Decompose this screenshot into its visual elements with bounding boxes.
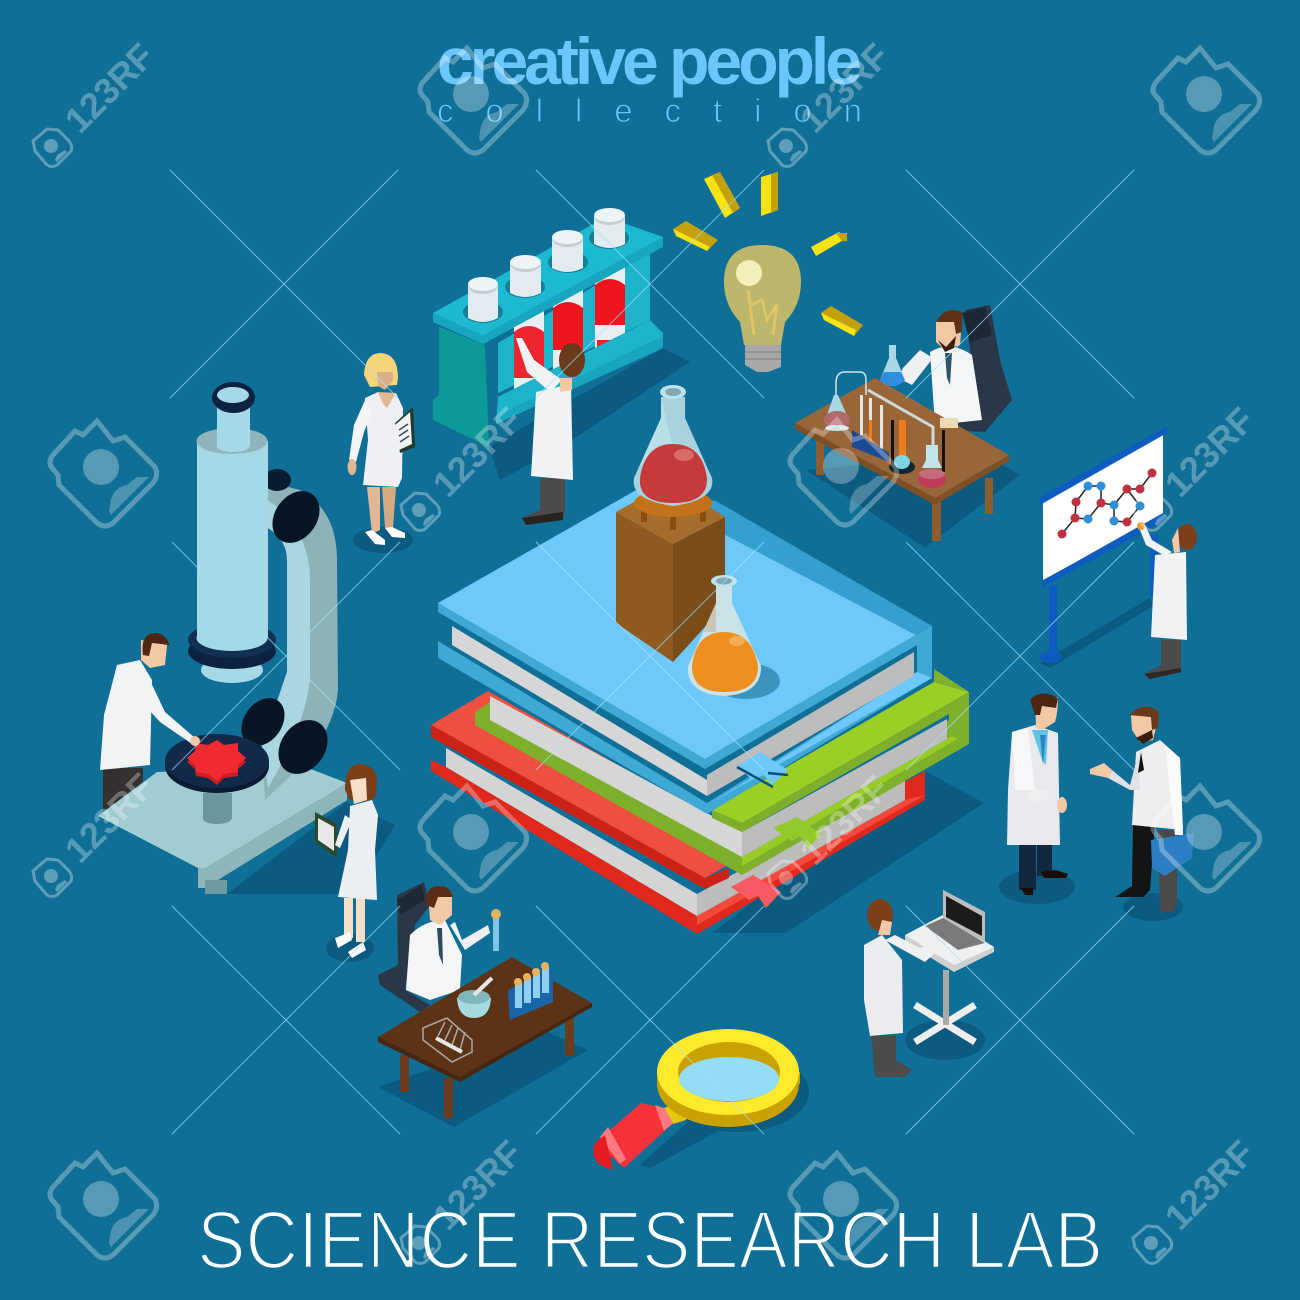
scientist at whiteboard bbox=[1137, 522, 1197, 679]
orange flask bbox=[688, 575, 780, 699]
desk top bbox=[378, 957, 592, 1077]
trolley base bbox=[915, 1005, 975, 1042]
tube bbox=[201, 657, 263, 683]
shadow bbox=[665, 1052, 809, 1132]
glass bbox=[724, 245, 801, 345]
watermark: diagonal hairlines bbox=[170, 170, 1134, 1134]
board shadow bbox=[1040, 598, 1153, 668]
books shadow bbox=[712, 771, 984, 933]
scientist with laptop trolley bbox=[864, 890, 994, 1077]
whiteboard with molecule bbox=[1040, 426, 1167, 668]
red book bbox=[431, 691, 925, 934]
person bbox=[871, 1035, 912, 1077]
shirt bbox=[930, 347, 982, 425]
glassware bbox=[824, 372, 958, 488]
scientist right bbox=[1090, 707, 1194, 921]
legs bbox=[1049, 585, 1057, 655]
tube 3 glass and liquid bbox=[553, 250, 583, 375]
mortar bbox=[457, 992, 491, 1018]
title: SCIENCE RESEARCH LAB bbox=[197, 1195, 1103, 1286]
screw base bbox=[745, 345, 781, 372]
desk with seated chemist (bottom) bbox=[378, 882, 592, 1127]
test tube rack bbox=[433, 208, 690, 480]
stand and red flask bbox=[634, 385, 712, 530]
green bookmark bbox=[773, 817, 822, 848]
tube holes bbox=[463, 227, 629, 323]
blue flask bbox=[880, 345, 905, 386]
scientist at rack bbox=[516, 338, 585, 525]
knobs bbox=[263, 469, 291, 491]
arm bbox=[262, 482, 338, 800]
watermark: 123RF labels: 123RF bbox=[792, 767, 897, 873]
watermark: 123RF labels: 123RF bbox=[57, 35, 162, 141]
scientist left bbox=[999, 693, 1075, 904]
red sample bbox=[187, 744, 246, 785]
shadow bbox=[227, 802, 395, 894]
watermark: 123RF labels: 123RF bbox=[57, 765, 162, 871]
back panel bbox=[498, 253, 650, 393]
scientist at microscope bbox=[100, 633, 200, 812]
light bulb with rays bbox=[673, 172, 863, 372]
stage bbox=[165, 739, 269, 793]
books stack with flasks bbox=[431, 385, 984, 934]
brunette scientist with clipboard bbox=[315, 764, 378, 962]
tube 4 glass and liquid bbox=[595, 225, 625, 355]
header: creative people collection: creative people bbox=[437, 24, 862, 98]
newton cradle bbox=[423, 1018, 472, 1062]
watermark: 123RF labels: 123RF bbox=[1157, 1132, 1262, 1238]
briefcase bbox=[1151, 833, 1194, 876]
hair and face bbox=[345, 764, 377, 802]
board bbox=[1043, 435, 1163, 580]
clipboard bbox=[395, 407, 415, 453]
desk with seated chemist (top right) bbox=[795, 305, 1020, 548]
desk legs bbox=[816, 435, 824, 475]
hair and face bbox=[364, 353, 398, 387]
chair bbox=[378, 882, 430, 1012]
desk legs bbox=[400, 1055, 409, 1092]
blue book bbox=[438, 489, 932, 814]
tube caps bbox=[468, 216, 625, 322]
watermark: 123RF labels: 123RF bbox=[425, 399, 530, 505]
base bbox=[98, 768, 347, 888]
mid plate bbox=[496, 320, 663, 424]
microscope bbox=[98, 382, 395, 894]
two scientists talking bbox=[999, 693, 1194, 921]
watermark: 123RF labels: 123RF bbox=[425, 1132, 530, 1238]
rack shadow bbox=[489, 348, 690, 480]
tube 2 glass and liquid bbox=[514, 275, 544, 400]
handle bbox=[664, 1100, 686, 1124]
molecule bbox=[1058, 468, 1156, 538]
shirt and arm bbox=[406, 920, 462, 1000]
magnifying glass bbox=[593, 1029, 809, 1170]
test tube in hand bbox=[493, 915, 499, 951]
desk shadow bbox=[806, 455, 1020, 548]
top plate bbox=[433, 217, 663, 344]
desk top bbox=[795, 378, 1009, 498]
blonde scientist with clipboard bbox=[348, 353, 415, 553]
blue bookmark bbox=[737, 752, 788, 787]
brown box bbox=[616, 482, 725, 662]
head bbox=[936, 313, 962, 350]
red bookmark bbox=[731, 875, 781, 908]
watermark: 123RF labels: 123RF bbox=[1157, 399, 1262, 505]
front knob bbox=[268, 711, 338, 783]
rays bbox=[673, 172, 863, 336]
clipboard bbox=[315, 812, 337, 858]
watermark: 123RF labels: 123RF bbox=[792, 35, 897, 141]
head bbox=[428, 893, 452, 925]
left leg bbox=[433, 327, 489, 447]
green book bbox=[475, 669, 969, 875]
pillar bbox=[203, 793, 232, 819]
header: creative people collection: collection bbox=[437, 92, 862, 129]
desk shadow bbox=[378, 1030, 588, 1127]
laptop bbox=[943, 890, 985, 942]
test tube rack bbox=[508, 968, 553, 1020]
tray bbox=[905, 915, 994, 972]
chair bbox=[950, 305, 1012, 432]
rim bbox=[657, 1041, 799, 1127]
